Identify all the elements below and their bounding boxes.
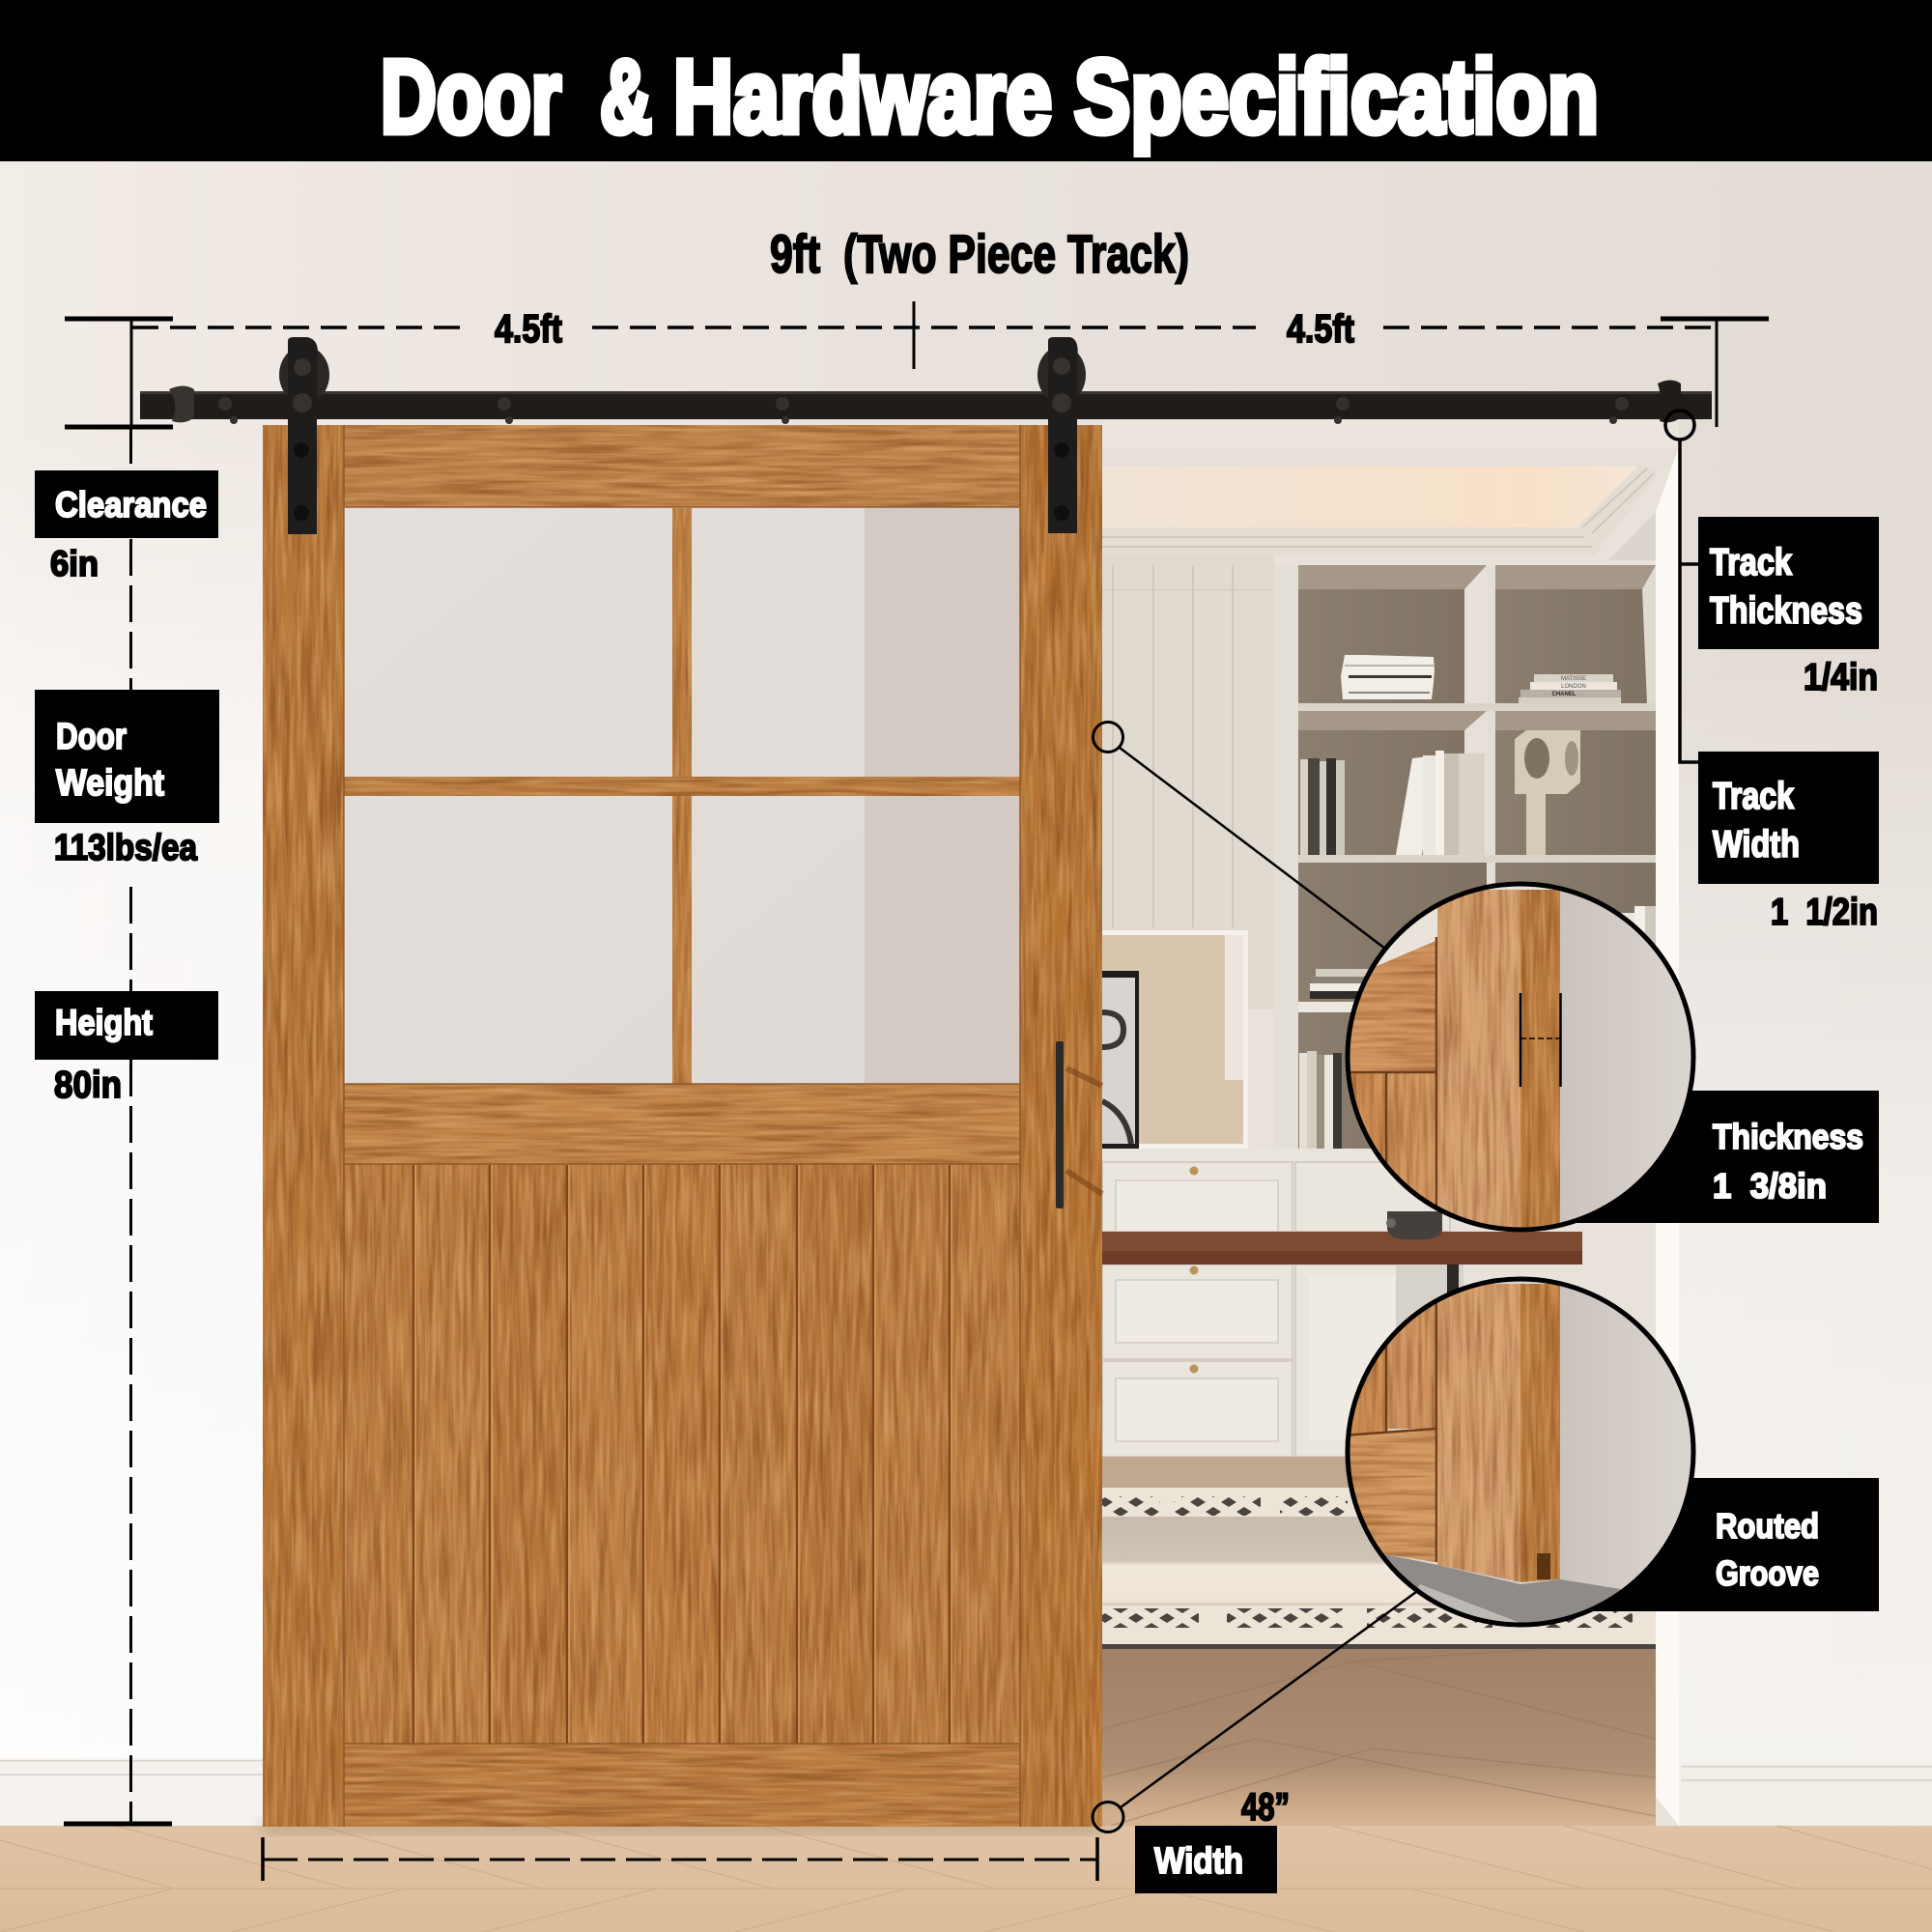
door handle — [1056, 1041, 1102, 1208]
title: & — [600, 38, 652, 155]
baseboards — [0, 1758, 1932, 1826]
thickness marker dash — [1520, 1037, 1560, 1039]
label: track thickness — [1698, 517, 1879, 698]
track bolts — [218, 397, 1629, 424]
ceiling corner wall — [1608, 467, 1656, 560]
label: routed groove — [1584, 1478, 1879, 1611]
label: door weight — [35, 690, 219, 868]
bookshelf — [1274, 565, 1656, 1164]
title: Door — [381, 38, 561, 155]
bottom rail — [344, 1744, 1020, 1827]
callout leader: lower — [1093, 1592, 1416, 1832]
opening: interior room — [1102, 447, 1679, 1826]
label: thickness — [1562, 1091, 1879, 1223]
label: track width: Width — [1713, 824, 1800, 866]
track thickness value: 1/4in — [1804, 657, 1878, 698]
track length label: 9ft (Two Piece Track) — [770, 223, 1189, 284]
magnifier: routed groove detail — [1343, 1275, 1700, 1633]
wall strip under track — [1102, 419, 1679, 447]
groove notch — [1537, 1553, 1550, 1579]
wainscot wall — [1102, 555, 1274, 1009]
books, middle left shelf — [1300, 751, 1485, 855]
books, top right shelf: LONDON — [1561, 684, 1586, 690]
thickness marker — [1520, 993, 1561, 1087]
glass panes — [346, 508, 1020, 1084]
door shadow — [263, 1822, 1102, 1832]
magnifier: thickness detail — [1343, 879, 1700, 1237]
label: track thickness: Track — [1710, 542, 1792, 583]
counter and upper drawers — [1102, 1149, 1518, 1232]
track width value: 1 1/2in — [1771, 892, 1878, 933]
label: thickness: Thickness — [1713, 1117, 1863, 1156]
label: height — [35, 991, 218, 1106]
right 4.5ft label: 4.5ft — [1287, 306, 1354, 351]
books, lower left shelf — [1299, 1051, 1342, 1150]
lower cabinet drawers — [1102, 1264, 1463, 1457]
top rail — [344, 425, 1020, 507]
bowl on desk — [1386, 1211, 1442, 1239]
books, top right shelf: CHANEL — [1551, 692, 1577, 697]
label: clearance — [35, 470, 218, 583]
label: thickness: 1 3/8in — [1713, 1166, 1827, 1206]
door width dimension — [263, 1837, 1097, 1881]
title: Hardware — [673, 38, 1052, 155]
books, top right shelf: MATISSE — [1561, 676, 1586, 682]
rug — [1102, 1488, 1656, 1649]
callout leader: upper — [1094, 723, 1385, 949]
label: door weight: Weight — [56, 763, 164, 804]
title bar — [0, 0, 1932, 161]
door — [263, 425, 1102, 1832]
books, third left shelf — [1310, 969, 1379, 999]
door joints — [344, 425, 1020, 1827]
books, third right shelf — [1620, 906, 1656, 1005]
label: width: Width — [1154, 1841, 1243, 1882]
sculpture — [1515, 730, 1580, 855]
clearance value: 6in — [50, 544, 99, 583]
label: routed groove: Groove — [1716, 1553, 1819, 1593]
glass mullions — [344, 508, 1020, 1084]
door planks — [344, 1164, 1020, 1744]
ceiling light cove — [1102, 467, 1637, 527]
interior floor — [1102, 1649, 1656, 1826]
label: width — [1135, 1786, 1290, 1893]
height value: 80in — [54, 1065, 122, 1106]
mid rail — [344, 1084, 1020, 1164]
label: track width: Track — [1713, 776, 1794, 817]
track width dimension line — [65, 301, 1769, 427]
floor — [0, 1826, 1932, 1932]
left hanger — [279, 337, 329, 534]
right hanger — [1037, 337, 1086, 533]
end stops — [169, 386, 194, 422]
width value: 48” — [1241, 1786, 1290, 1829]
label: routed groove: Routed — [1716, 1506, 1819, 1546]
crown moulding — [1102, 467, 1656, 555]
opening right trim — [1656, 447, 1679, 1826]
left 4.5ft: 4.5ft — [495, 306, 562, 351]
framed artwork — [1102, 930, 1248, 1149]
books, top right shelf — [1519, 674, 1621, 703]
ceiling trim — [1102, 447, 1679, 467]
track rail — [140, 381, 1712, 424]
height dimension line — [64, 427, 172, 1824]
label: door weight: Door — [56, 717, 127, 757]
label: track width — [1698, 752, 1879, 933]
right stile — [1020, 425, 1102, 1827]
rear floor — [1102, 1457, 1489, 1488]
track callout connector — [1665, 411, 1698, 762]
label: clearance: Clearance — [55, 485, 207, 525]
door weight value: 113lbs/ea — [54, 828, 198, 868]
left stile — [263, 425, 344, 1827]
label: track thickness: Thickness — [1710, 590, 1862, 632]
books, top left shelf — [1341, 655, 1435, 699]
door floor — [1384, 1554, 1621, 1623]
desk — [1102, 1232, 1582, 1293]
label: height: Height — [55, 1003, 153, 1042]
title: Specification — [1074, 38, 1599, 155]
